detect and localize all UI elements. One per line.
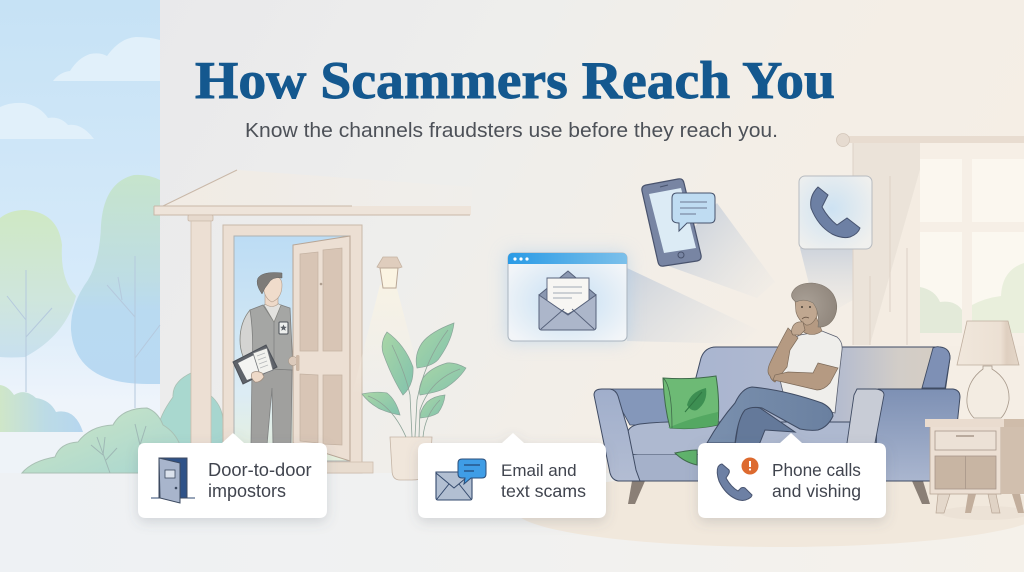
foreground bushes [22,373,232,473]
front door frame and open doorway [223,225,373,473]
icon: phone with alert badge [717,458,758,500]
label: email and text scams: Email and [501,461,577,480]
email window icon [507,253,627,341]
label: email and text scams: text scams [501,481,586,501]
table lamp [957,321,1019,418]
door-to-door impostor [233,273,293,445]
icon: envelope with chat bubble [436,459,486,500]
smartphone with chat bubble icon [642,179,715,266]
wall lamp with glow [352,257,425,395]
label: door-to-door impostors: Door-to-door [208,459,312,480]
porch pillar [188,215,213,451]
bedside table [925,419,1024,520]
card: email and text scams [418,433,606,518]
light beams toward the person [627,203,870,345]
label: door-to-door impostors: impostors [208,481,286,501]
outdoor scene: sky, clouds and trees [0,0,160,473]
card: door-to-door impostors [138,433,327,518]
potted plant [362,323,466,480]
curtain rod and curtain [836,134,1024,345]
label: phone calls and vishing: Phone calls [772,460,861,480]
porch roof [154,170,473,215]
label: phone calls and vishing: and vishing [772,481,861,501]
open door leaf [288,236,350,461]
card: phone calls and vishing [698,433,886,518]
thoughtful person on sofa [675,283,842,465]
green pillow [663,376,719,429]
icon: door [151,458,195,503]
subtitle: Know the channels fraudsters use before they reach you. [245,120,778,142]
floor rug [515,473,1024,547]
phone handset icon tile [799,176,872,249]
window [920,143,1024,346]
sofa [594,347,960,504]
title: How Scammers Reach You [195,52,835,110]
